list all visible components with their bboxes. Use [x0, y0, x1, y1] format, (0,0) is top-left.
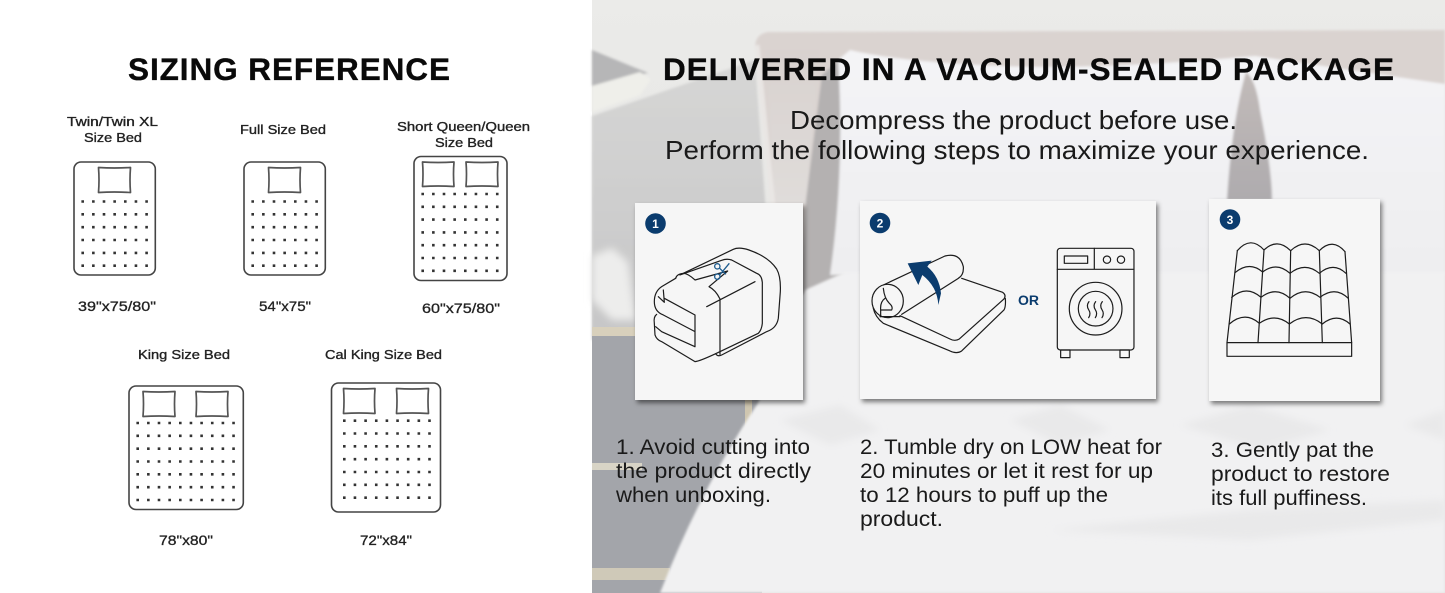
nightstand [592, 336, 762, 593]
text: step 2 [860, 436, 1162, 531]
bed: king [129, 347, 243, 548]
bed: twin [67, 114, 158, 314]
bed: twin: Twin/Twin XL [67, 114, 158, 129]
icon: tumble dryer [1057, 248, 1134, 358]
crumpled sheet on nightstand [592, 248, 636, 320]
background photo: bedroom [592, 0, 1445, 593]
bed: twin: 39"x75/80" [78, 298, 156, 314]
gap between pillows [1227, 72, 1272, 200]
bed: twin: Size Bed [84, 130, 142, 145]
bed: king: King Size Bed [138, 347, 230, 362]
text: step 3: product to restore [1211, 463, 1390, 486]
text: step 2: product. [860, 508, 943, 531]
quilting [780, 405, 1445, 540]
text: step 1: the product directly [616, 460, 812, 483]
wall shade [592, 60, 775, 340]
text: step 2: 2. Tumble dry on LOW heat for [860, 436, 1162, 459]
panel: step 3 card [1209, 199, 1380, 401]
bed: short queen / queen: 60"x75/80" [422, 300, 500, 316]
title: sizing reference: SIZING REFERENCE [128, 51, 450, 87]
label: or: OR [1018, 293, 1039, 308]
bed: full: 54"x75" [259, 298, 311, 314]
subtitle [665, 105, 1369, 165]
bed: cal king: 72"x84" [360, 532, 412, 548]
bed: short queen / queen: Short Queen/Queen [397, 119, 530, 134]
text: step 3 [1211, 439, 1390, 510]
badge 2 [870, 213, 890, 233]
bed: cal king: Cal King Size Bed [325, 347, 442, 362]
bed: short queen / queen [397, 119, 530, 316]
text: step 2: 20 minutes or let it rest for up [860, 460, 1153, 483]
bed: full [240, 122, 326, 314]
badge 3 [1220, 209, 1240, 230]
icon: rolled topper with arrow [872, 255, 1005, 353]
bed: cal king [325, 347, 442, 548]
badge 1 [645, 213, 666, 234]
text: step 3: its full puffiness. [1211, 487, 1367, 510]
text: step 1: 1. Avoid cutting into [616, 436, 810, 459]
pillows [830, 50, 1445, 275]
panel: step 2 card [860, 201, 1156, 399]
text: step 1 [615, 436, 812, 507]
icon: puffed topper [1227, 243, 1352, 356]
bed: full: Full Size Bed [240, 122, 326, 137]
subtitle: Perform the following steps to maximize your experience. [665, 135, 1369, 165]
badge 2: 2 [877, 216, 884, 230]
lamp [592, 50, 651, 112]
headboard [755, 30, 1445, 280]
white left background [0, 0, 592, 593]
bed: king: 78"x80" [159, 532, 213, 548]
mattress [660, 272, 1445, 593]
bed: short queen / queen: Size Bed [435, 135, 493, 150]
text: step 3: 3. Gently pat the [1211, 439, 1374, 462]
title: delivered in a vacuum-sealed package: DELIVERED IN A VACUUM-SEALED PACKAGE [663, 51, 1394, 87]
badge 1: 1 [652, 217, 659, 231]
panel: step 1 card [635, 203, 803, 400]
text: step 2: to 12 hours to puff up the [860, 484, 1108, 507]
subtitle: Decompress the product before use. [790, 105, 1237, 135]
badge 3: 3 [1227, 213, 1234, 227]
text: step 1: when unboxing. [615, 484, 771, 507]
icon: folded vacuum package with scissors [654, 248, 780, 362]
